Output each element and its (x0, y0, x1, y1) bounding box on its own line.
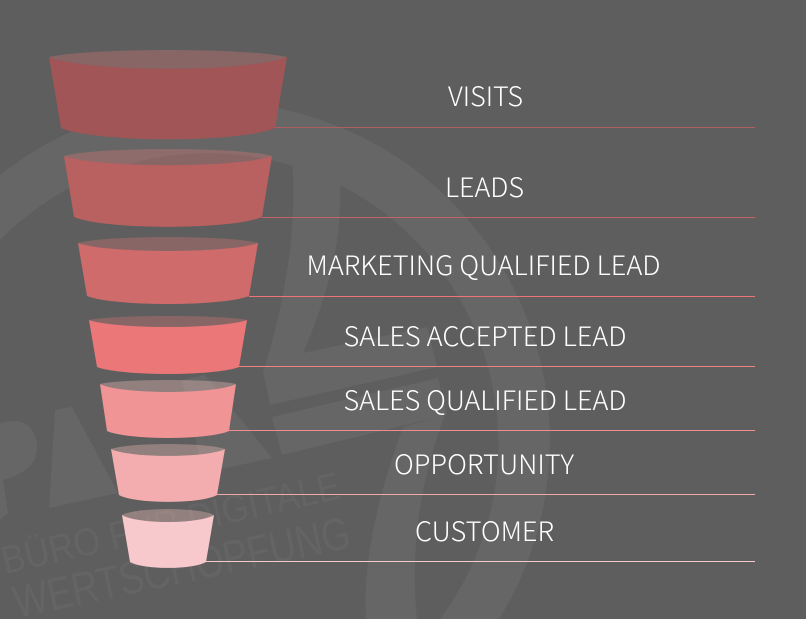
funnel stage: marketing qualified lead (78, 237, 755, 304)
label: marketing qualified lead: MARKETING QUALIFIED LEAD (306, 244, 660, 283)
label: opportunity: OPPORTUNITY (394, 443, 574, 482)
funnel stage: sales qualified lead (100, 380, 755, 438)
watermark logo (0, 101, 550, 619)
watermark logo: BÜRO FÜR DIGITALE (0, 465, 345, 583)
funnel stage: visits (49, 50, 755, 139)
label: sales qualified lead: SALES QUALIFIED LEAD (344, 379, 626, 418)
label: sales accepted lead: SALES ACCEPTED LEAD (344, 315, 626, 354)
label: visits: VISITS (448, 75, 523, 114)
label: customer: CUSTOMER (415, 510, 554, 549)
funnel stage: opportunity (111, 444, 755, 502)
funnel stage: leads (64, 149, 755, 227)
label: leads: LEADS (445, 166, 524, 205)
funnel stage: sales accepted lead (89, 316, 755, 374)
funnel stage: customer (122, 509, 755, 568)
